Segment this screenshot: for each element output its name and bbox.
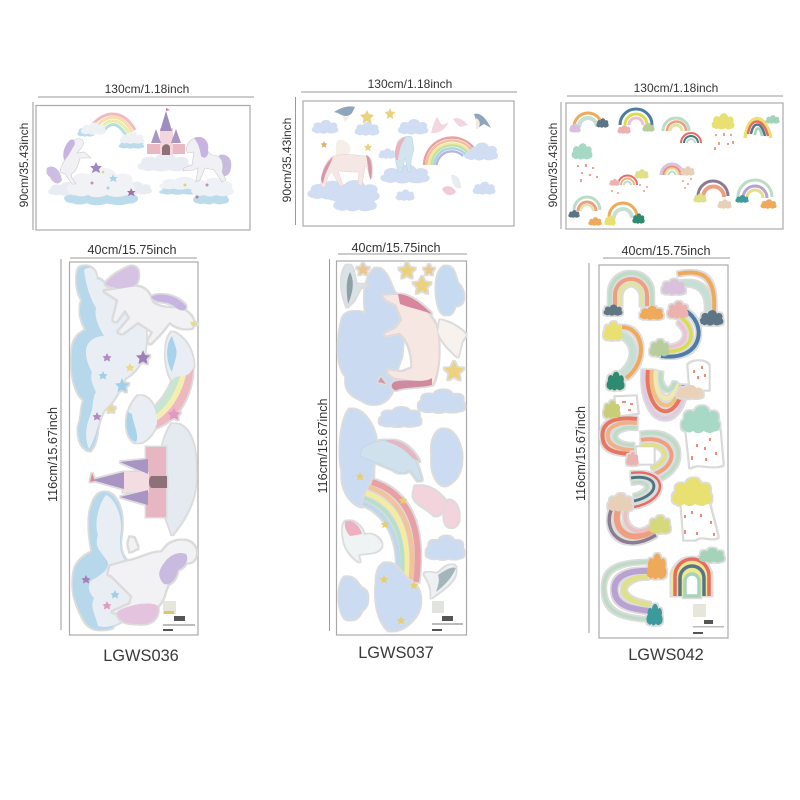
height dimension 90cm: 90cm/35.43inch [17, 123, 31, 207]
height dimension 90cm [546, 102, 561, 229]
rainbow C [650, 301, 699, 357]
rainbow 9 [661, 164, 695, 189]
rainbow D [604, 322, 641, 390]
width dimension 130cm: 130cm/1.18inch [105, 82, 189, 96]
rainbow 11 [735, 180, 777, 209]
rain cloud mint [572, 143, 597, 182]
lower clouds [339, 536, 464, 631]
drip cloud beige [677, 361, 709, 399]
rainbow 8 [609, 169, 649, 194]
width dimension 40cm [70, 243, 197, 258]
unicorn bottom [108, 537, 196, 624]
large cloud with top unicorn [72, 266, 150, 451]
castle [138, 108, 191, 171]
layout frame [566, 103, 783, 229]
yellow dots on rainbow [356, 472, 418, 624]
height dimension 90cm: 90cm/35.43inch [280, 118, 294, 202]
rainbow stickers [602, 273, 724, 625]
panel: bottom left sheet LGWS036 [46, 243, 198, 635]
height dimension 90cm [280, 97, 296, 225]
rainbow 2 [617, 109, 655, 134]
rainbow F [602, 396, 638, 454]
height dimension 90cm: 90cm/35.43inch [546, 123, 560, 207]
birds [334, 106, 491, 129]
rainbow B [662, 273, 723, 326]
sheet frame [70, 262, 198, 635]
mid clouds [379, 390, 465, 486]
rainbows grid [568, 109, 780, 226]
watercolor clouds [307, 119, 498, 211]
unicorn left [46, 139, 91, 184]
width dimension 130cm: 130cm/1.18inch [634, 81, 718, 95]
rainbow J [604, 554, 666, 625]
sheet frame [599, 265, 728, 638]
product code LGWS036: LGWS036 [103, 647, 179, 665]
height dimension 116cm: 116cm/15.67inch [574, 406, 588, 501]
rain cloud yellow [712, 113, 734, 150]
layout frame [303, 101, 514, 226]
rainbow K [671, 548, 724, 596]
height dimension 90cm [17, 102, 33, 230]
panel: top left unicorn castle layout [17, 82, 254, 230]
big watercolor cloud [338, 268, 406, 404]
rainbow A [604, 273, 663, 320]
rainbow [424, 138, 473, 165]
width dimension 130cm: 130cm/1.18inch [368, 77, 452, 91]
panel: bottom centre sheet LGWS037 [316, 241, 467, 635]
upper left cloud with unicorn [340, 409, 422, 507]
width dimension 40cm: 40cm/15.75inch [352, 241, 440, 255]
panel: top right rainbows layout [546, 81, 783, 229]
butterflies [343, 486, 459, 562]
small top bird [341, 265, 368, 307]
rainbow 12 [568, 197, 602, 226]
layout frame [36, 106, 250, 230]
rainbow E [644, 370, 686, 418]
lower cloud [73, 492, 136, 630]
drip cloud yellow [672, 478, 718, 540]
rainbow 6 [745, 115, 780, 138]
rainbow 1 [569, 113, 609, 133]
rainbow sticker [126, 332, 194, 443]
panel: top centre unicorn rainbow layout [280, 77, 517, 226]
unicorn top [104, 266, 198, 344]
height dimension 116cm: 116cm/15.67inch [316, 399, 330, 493]
rainbow G [626, 433, 678, 481]
width dimension 40cm: 40cm/15.75inch [622, 244, 710, 258]
tall cloud [160, 424, 196, 535]
width dimension 40cm: 40cm/15.75inch [88, 243, 176, 257]
rainbow H [631, 472, 660, 507]
horse with wing [378, 294, 466, 390]
rainbow 4 [681, 133, 701, 143]
rainbow 10 [693, 181, 732, 209]
castle sideways [90, 447, 167, 517]
rainbow 3 [663, 118, 689, 131]
stars [356, 262, 464, 380]
height dimension 116cm: 116cm/15.67inch [46, 407, 60, 502]
stars [320, 108, 396, 151]
rainbow top left [77, 114, 144, 149]
product label thumbnail [163, 601, 195, 631]
width dimension 40cm [338, 241, 467, 255]
rainbow I [608, 493, 670, 543]
product code LGWS042: LGWS042 [628, 646, 704, 664]
sheet frame [336, 261, 466, 635]
rainbow big [363, 482, 418, 582]
butterflies [431, 117, 468, 195]
bird bottom [424, 565, 456, 598]
product label thumbnail [432, 601, 463, 631]
unicorn right [159, 137, 234, 205]
rainbow 13 [604, 203, 645, 226]
product label thumbnail [693, 604, 724, 634]
drip cloud mint [681, 406, 723, 468]
cloud cluster left [48, 162, 152, 205]
top right cloud [436, 266, 464, 315]
winged horse [321, 140, 372, 188]
panel: bottom right sheet LGWS042 [574, 244, 730, 638]
product code LGWS037: LGWS037 [358, 644, 434, 662]
standing unicorn [395, 136, 414, 172]
